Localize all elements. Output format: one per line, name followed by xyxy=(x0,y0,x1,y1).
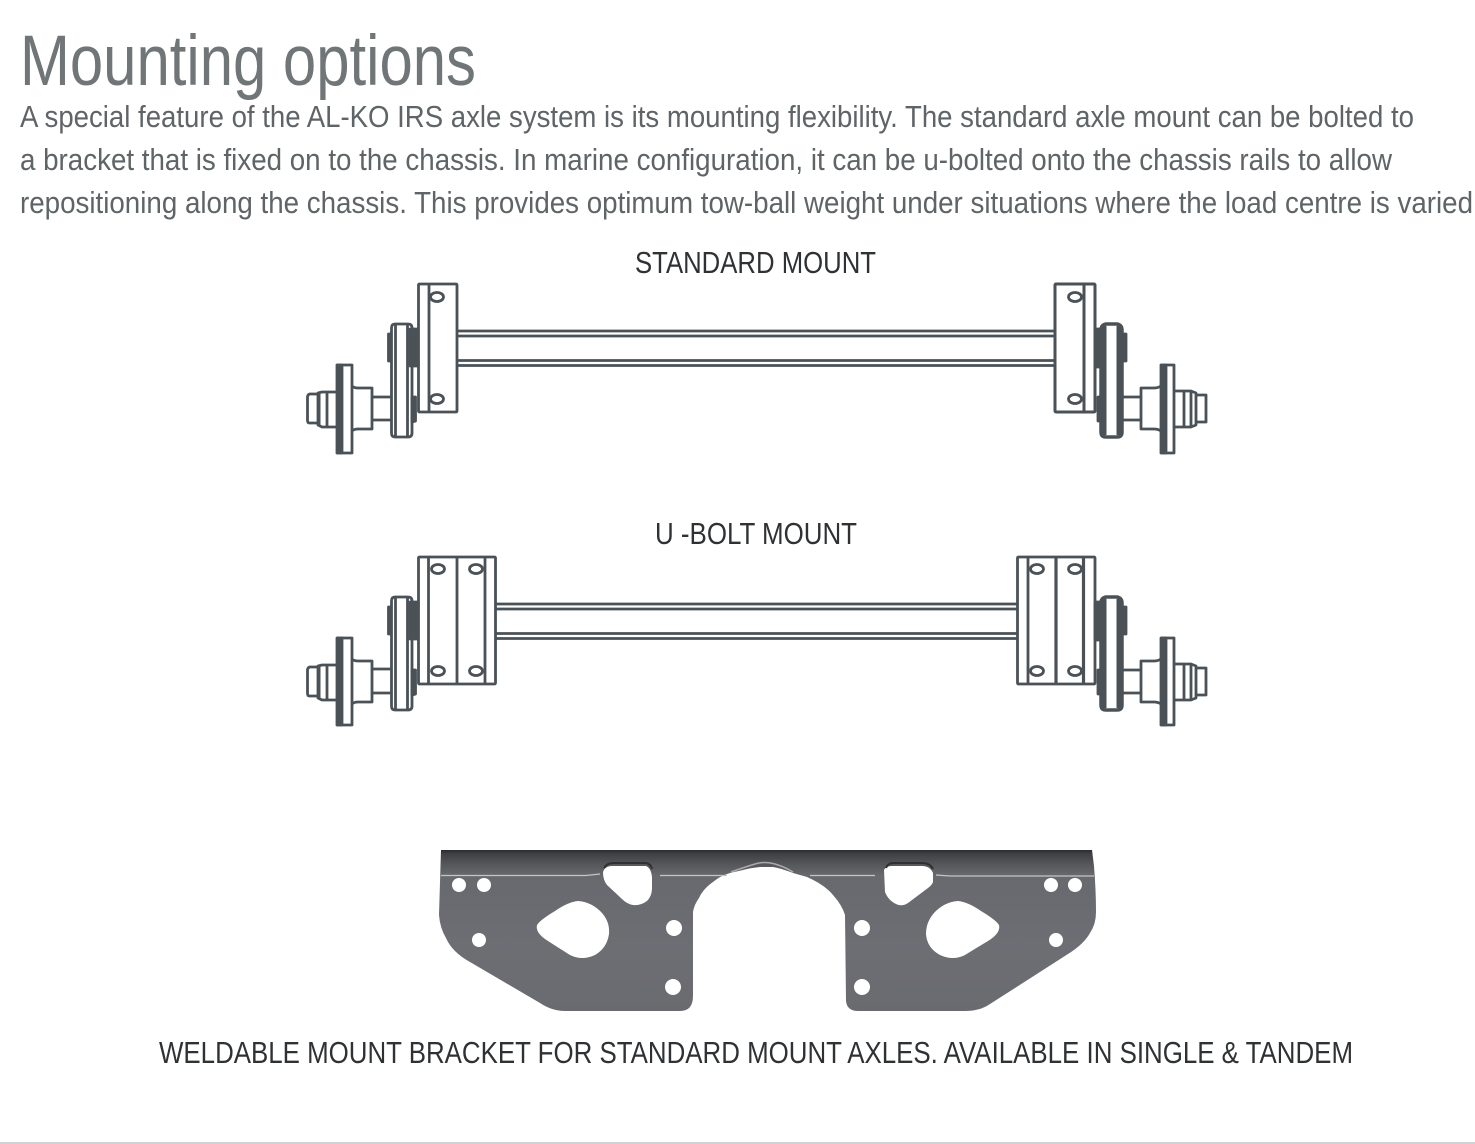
central fold highlight xyxy=(731,862,793,872)
cut-outs xyxy=(452,866,1082,995)
title: Mounting options xyxy=(20,22,476,101)
left wheel hub xyxy=(308,597,418,725)
weld line xyxy=(441,874,1094,876)
axle tube xyxy=(457,331,1055,366)
diagram: u-bolt mount axle xyxy=(308,557,1206,725)
left mounting plate xyxy=(418,284,457,412)
heading: u-bolt mount: U -BOLT MOUNT xyxy=(655,516,857,551)
axle tube xyxy=(495,604,1017,638)
slot lips xyxy=(604,863,933,869)
right wheel hub xyxy=(1095,597,1206,725)
heading: standard mount: STANDARD MOUNT xyxy=(635,245,876,280)
left wheel hub xyxy=(308,324,418,453)
right mounting plate xyxy=(1055,284,1095,412)
right wheel hub xyxy=(1095,324,1206,453)
bracket plate xyxy=(439,850,1096,1011)
right u-bolt plate xyxy=(1018,557,1095,684)
intro paragraph xyxy=(20,99,1473,220)
diagram: standard mount axle xyxy=(308,284,1206,453)
left u-bolt plate xyxy=(418,557,496,684)
weldable mount bracket xyxy=(439,850,1096,1011)
